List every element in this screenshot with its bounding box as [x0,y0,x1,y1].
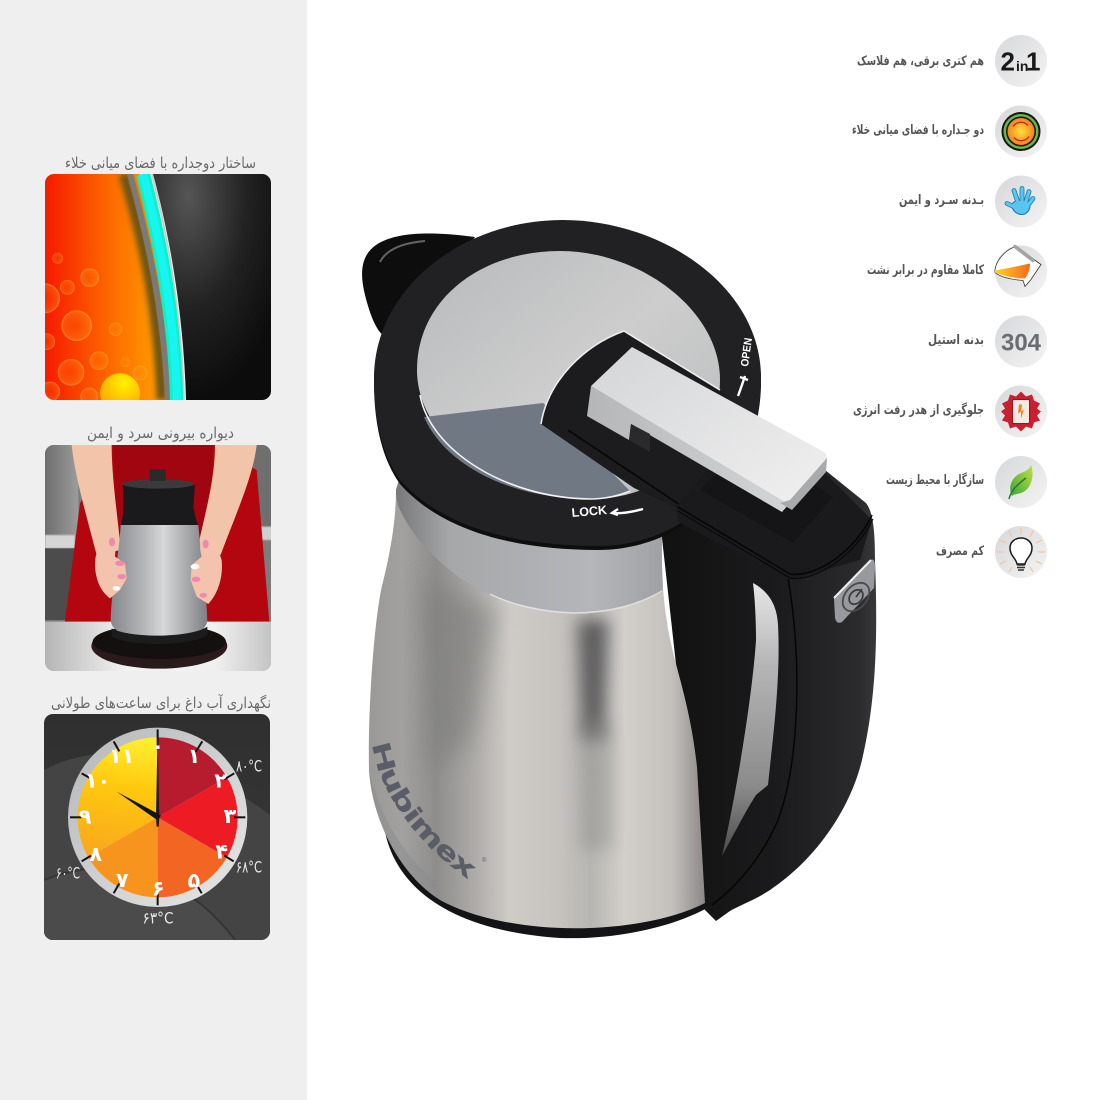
label: بـدنه سـرد و ایمن [899,193,984,208]
hour numerals: ۰ [151,734,164,758]
icon: pan [995,246,1047,298]
hour numerals: ۷ [116,868,129,892]
label: کاملا مقاوم در برابر نشت [867,263,984,278]
feature row: cool body [899,176,1047,228]
steel lid disc [417,251,720,499]
label: بدنه استیل [928,333,984,348]
label: جلوگیری از هدر رفت انرژی [853,402,984,418]
feature row: double wall [852,106,1047,158]
icon: 304: 304 [1001,330,1042,356]
icon: leaf [995,456,1047,508]
icon: blue hand [995,176,1047,228]
hour numerals: ۱۰ [85,769,110,793]
steel reflections [425,580,495,770]
hour numerals: ۶ [152,876,165,900]
hour numerals: ۱ [188,744,200,768]
power button [834,559,875,623]
heading: hot water retention: نگهداری آب داغ برای ساعت‌های طولانی [51,694,271,712]
hands [95,551,127,598]
temperature labels [56,756,262,928]
panel: hands holding kettle photo [45,445,273,672]
temperature labels: ۶۳°C [142,908,174,928]
feature row: 2 in 1 [857,35,1047,87]
lid open and lock marks: OPEN [739,337,755,367]
neck band [396,482,663,612]
lid slot [541,331,873,580]
hour numerals: ۵ [188,869,200,893]
kettle product image [362,220,876,938]
nails [109,538,115,546]
logo: Hubimex [372,743,476,880]
hour ticks [70,729,245,905]
bubbles [45,253,148,400]
logo: ® [482,857,487,864]
icon: light bulb [995,526,1047,578]
label: کم مصرف [936,544,984,559]
table [45,622,272,672]
feature row: leak proof [867,246,1047,298]
feature row: eco friendly [886,456,1047,508]
heading: cool outer wall: دیواره بیرونی سرد و ایمن [87,424,234,442]
feature row: steel 304 [928,316,1047,368]
panel: double wall illustration [45,174,271,400]
hour numerals: ۴ [215,840,228,864]
temperature labels: ۶۸°C [236,858,262,876]
label: هم کتری برقی، هم فلاسک [857,54,984,69]
hour numerals [79,745,236,896]
lid open and lock marks: LOCK [571,503,608,520]
left sidebar background [0,0,307,1100]
lid ring [374,220,761,550]
hour numerals: ۲ [214,769,227,793]
silver lever [587,347,827,512]
icon: 2in1: 2 [1000,46,1015,76]
feature row: low consumption [936,526,1047,578]
lid open and lock marks [571,337,755,520]
spout [362,233,475,338]
mini kettle [111,525,207,638]
clock hands [156,749,160,827]
icon: 2in1: 1 [1026,46,1040,76]
icon: concentric rings [995,106,1047,158]
base [91,628,228,669]
temperature labels: ۶۰°C [56,864,80,882]
hour numerals: ۹ [79,805,92,829]
heading: double wall structure: ساختار دوجداره با فضای میانی خلاء [65,154,256,172]
arms [72,445,121,555]
handle and black body [660,470,876,921]
clock dial [68,728,247,907]
panel: temperature clock chart [44,714,270,940]
icon: 2in1: in [1016,58,1028,74]
label: سازگار با محیط زیست [886,472,984,488]
hour numerals: ۸ [89,842,102,866]
icon: 2in1 [995,35,1047,87]
icon: red burst [995,386,1047,438]
hour numerals: ۱۱ [109,744,134,768]
label: دو جـداره با فضای میانی خلاء [852,123,984,138]
temperature labels: ۸۰°C [236,756,262,776]
feature row: energy saving [853,386,1047,438]
steel body [368,482,705,938]
dress [65,445,269,622]
hour numerals: ۳ [224,804,237,828]
